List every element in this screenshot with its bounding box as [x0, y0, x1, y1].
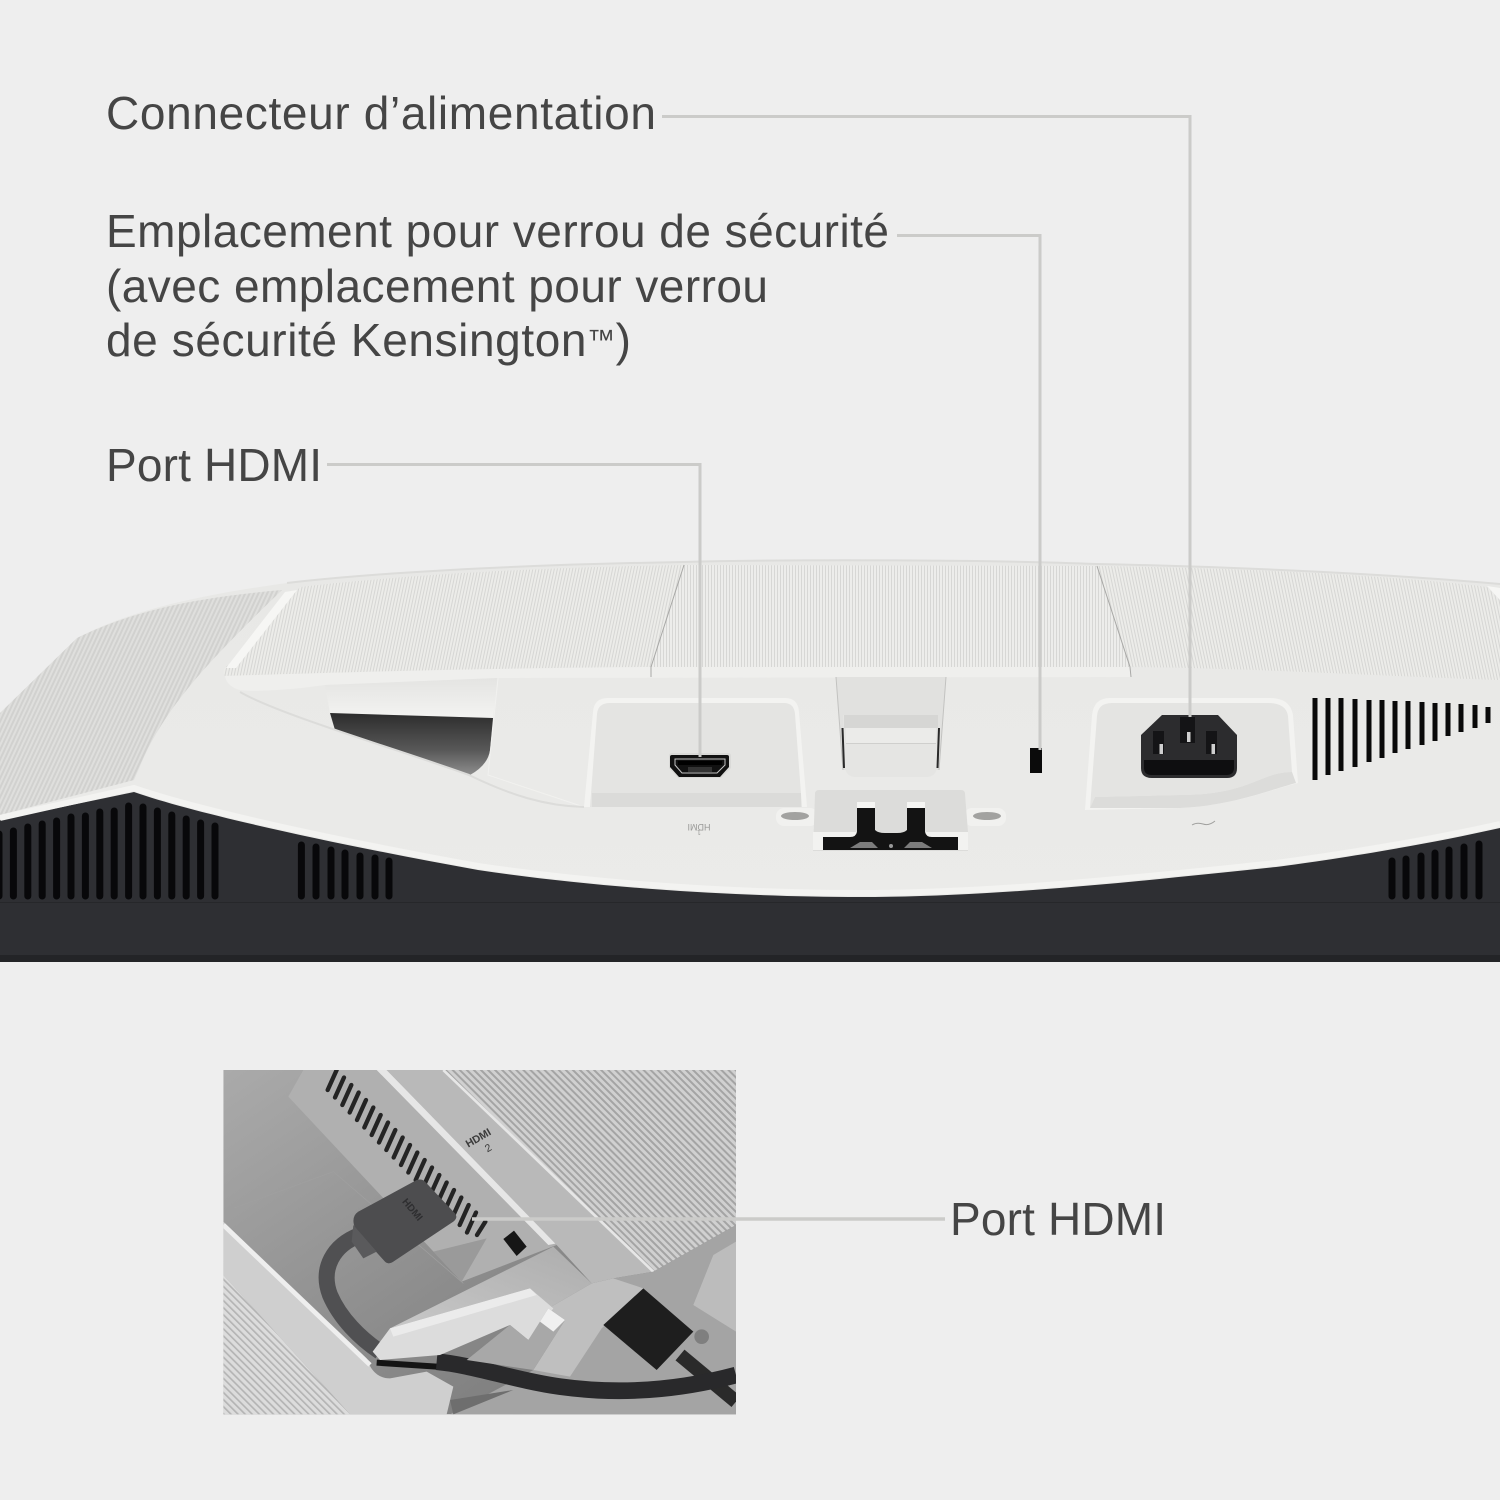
- bright stripes: [226, 590, 297, 668]
- label: security slot: de sécurité Kensington: [106, 314, 586, 366]
- stand lip: [225, 667, 1131, 691]
- right structure: [450, 1225, 736, 1414]
- label: HDMI port: Port HDMI: [106, 439, 322, 491]
- label: security slot: [106, 205, 889, 366]
- clip arm: [390, 1247, 592, 1328]
- label: security slot: (avec emplacement pour verrou: [106, 260, 768, 312]
- bright edge above housing: [0, 788, 1500, 893]
- lower left texture: [223, 1275, 350, 1414]
- HDMI recess: [584, 698, 807, 807]
- center hinge: [836, 677, 946, 777]
- monitor body: [0, 560, 1500, 900]
- leader line: power: [662, 116, 1190, 717]
- HDMI connector: HDMI: [399, 1197, 424, 1224]
- left rim: [223, 1222, 453, 1414]
- label: security slot: ™: [587, 324, 615, 355]
- HDMI connector: [352, 1179, 456, 1263]
- AC symbol: [1192, 821, 1215, 825]
- dark lower housing: [0, 792, 1500, 962]
- leader line: inset HDMI: [472, 1217, 945, 1221]
- label: security slot: ): [616, 314, 631, 366]
- icon: power connector: [1141, 715, 1237, 778]
- center stand panel: [651, 565, 1130, 667]
- right upper vents: [1315, 698, 1488, 780]
- monitor rear view: [0, 560, 1500, 962]
- leader line: HDMI: [327, 464, 700, 757]
- inset photo: HDMI cable: [223, 1070, 736, 1414]
- top rim: [287, 560, 1500, 584]
- white stripe: [377, 1070, 557, 1245]
- label: inset HDMI port: Port HDMI: [950, 1193, 1166, 1245]
- cable loop: [327, 1235, 380, 1352]
- icon: security lock slot: [1030, 748, 1042, 773]
- left stand panel: [224, 565, 684, 676]
- HDMI label: 2: [483, 1142, 494, 1155]
- small HDMI 1 label: 1: [697, 828, 701, 835]
- photo background: [223, 1070, 736, 1414]
- vent slots: [328, 1070, 485, 1235]
- cable cutout: [325, 678, 584, 807]
- cable clip: [813, 790, 968, 851]
- label: power connector: Connecteur d’alimentation: [106, 87, 656, 139]
- shadow below cable: [450, 1390, 513, 1414]
- neck band: [387, 1070, 653, 1283]
- right lower vents: [1392, 844, 1479, 896]
- lower cable: [377, 1363, 437, 1367]
- recess outline: [370, 1203, 464, 1284]
- small HDMI 1 label: HDMI: [688, 822, 710, 832]
- middle left vents: [301, 845, 389, 896]
- icon: HDMI port: [669, 753, 731, 778]
- left vents: [0, 806, 215, 896]
- upper right texture: [443, 1070, 736, 1272]
- power recess: [1085, 698, 1298, 810]
- screws: [776, 808, 1006, 826]
- left textured grip: [0, 590, 282, 815]
- leader line: security slot: [897, 236, 1040, 750]
- icon: lock slot: [503, 1231, 527, 1256]
- vent plate: [288, 1070, 557, 1282]
- label: security slot: Emplacement pour verrou de sécurité: [106, 205, 889, 257]
- right textured panel: [1097, 566, 1500, 680]
- HDMI label: HDMI: [464, 1126, 493, 1150]
- right connector: [603, 1288, 736, 1402]
